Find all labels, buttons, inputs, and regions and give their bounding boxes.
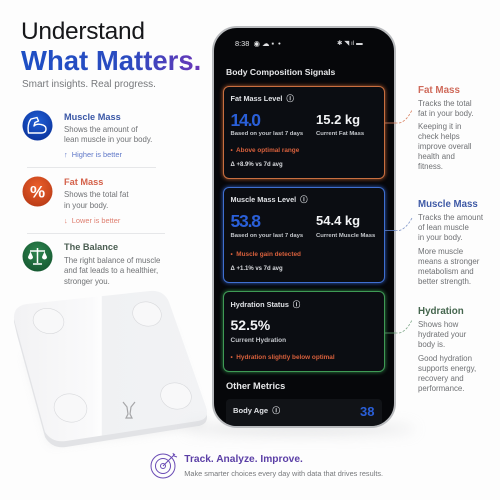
card: muscle mass level: Δ +1.1% vs 7d avg xyxy=(230,266,283,272)
description xyxy=(64,190,129,210)
card: muscle mass level: Muscle Mass Level ⓘ xyxy=(230,194,308,204)
right callout: muscle mass: Muscle Mass xyxy=(418,198,478,210)
right callout: muscle mass: Tracks the amount xyxy=(418,212,483,222)
card: hydration status: 52.5% xyxy=(230,317,270,333)
status bar: ✱ ◥ ıl ▬ xyxy=(337,40,363,46)
description: Shows the amount of xyxy=(64,125,138,134)
card: muscle mass level: 54.4 kg xyxy=(316,213,360,228)
note: ↓ Lower is better xyxy=(64,216,120,224)
right callout: hydration: Good hydration xyxy=(418,354,472,363)
description: lean muscle in your body. xyxy=(64,135,152,144)
status bar xyxy=(235,38,363,48)
title xyxy=(21,18,201,76)
footer heading: Track. Analyze. Improve. xyxy=(184,454,303,465)
connector lines xyxy=(385,110,412,334)
heading: The Balance xyxy=(64,242,118,252)
description: The right balance of muscle xyxy=(64,256,160,264)
row: body age xyxy=(226,399,382,429)
heading: body composition signals: Body Composition Signals xyxy=(226,66,335,76)
heading: Fat Mass xyxy=(64,177,103,187)
card: fat mass level: Based on your last 7 days xyxy=(230,131,303,137)
right callout: fat mass: health and xyxy=(418,152,455,161)
right callout: fat mass: check helps xyxy=(418,132,460,141)
card: muscle mass level: Current Muscle Mass xyxy=(316,233,375,239)
card: fat mass level: Fat Mass Level ⓘ xyxy=(230,94,294,102)
card: fat mass level: Δ +8.9% vs 7d avg xyxy=(230,162,283,168)
right callout: fat mass: fitness. xyxy=(418,162,443,171)
right callout: hydration: hydrated your xyxy=(418,330,466,339)
card: muscle mass level: Based on your last 7 days xyxy=(230,233,303,239)
icon: target xyxy=(150,452,178,478)
card: hydration status: Current Hydration xyxy=(230,337,286,344)
description: and fat leads to a healthier, xyxy=(64,266,158,275)
title: Understand xyxy=(21,18,145,45)
footer text: Make smarter choices every day with data that drives results. xyxy=(184,468,383,478)
right callout: hydration: performance. xyxy=(418,384,464,393)
description xyxy=(64,125,152,144)
card: fat mass level: 14.0 xyxy=(230,110,260,130)
icon: percent xyxy=(22,176,52,206)
right callout: muscle mass: in your body. xyxy=(418,232,463,242)
heading: other metrics: Other Metrics xyxy=(226,380,285,390)
left item: the balance xyxy=(22,242,160,286)
icon: percent: % xyxy=(30,182,45,202)
right callout: fat mass: improve overall xyxy=(418,142,472,151)
card: hydration status xyxy=(223,291,385,372)
description: Shows the total fat xyxy=(64,190,129,199)
shadow under phone xyxy=(185,424,415,434)
right callout: muscle mass: More muscle xyxy=(418,246,463,256)
right callout: fat mass xyxy=(418,85,474,171)
note: ↑ Higher is better xyxy=(64,150,122,159)
right callout: hydration xyxy=(418,306,476,393)
footer banner xyxy=(150,452,383,478)
description xyxy=(64,256,160,286)
icon: flexed arm xyxy=(22,110,52,140)
icon: scales xyxy=(22,242,52,272)
right callout: muscle mass: means a stronger xyxy=(418,256,479,266)
row: body age: Body Age ⓘ xyxy=(233,406,280,415)
card: hydration status: • Hydration slightly below optimal xyxy=(230,354,335,361)
left item: fat mass xyxy=(22,176,129,224)
right callout: hydration: Hydration xyxy=(418,306,464,317)
right callout: fat mass: Keeping it in xyxy=(418,122,461,131)
card: muscle mass level: • Muscle gain detected xyxy=(230,251,301,258)
title: What Matters. xyxy=(21,45,201,76)
right callout: muscle mass xyxy=(418,198,483,286)
phone xyxy=(212,26,396,428)
right callout: fat mass: Fat Mass xyxy=(418,85,460,96)
right callout: hydration: recovery and xyxy=(418,374,464,383)
right callout: muscle mass: metabolism and xyxy=(418,266,474,276)
card: muscle mass level xyxy=(223,187,385,283)
card: fat mass level xyxy=(223,86,385,179)
description: in your body. xyxy=(64,201,108,210)
card: fat mass level: 15.2 kg xyxy=(316,112,360,127)
card: muscle mass level: 53.8 xyxy=(230,210,260,230)
right callout: hydration: body is. xyxy=(418,340,445,349)
left item: muscle mass xyxy=(22,110,152,159)
right callout: fat mass: fat in your body. xyxy=(418,109,474,118)
right callout: muscle mass: better strength. xyxy=(418,276,471,286)
right callout: hydration: supports energy, xyxy=(418,364,476,373)
heading: Muscle Mass xyxy=(64,112,121,122)
status bar: 8:38 ◉ ☁ ▪ • xyxy=(235,38,281,48)
right callout: fat mass: Tracks the total xyxy=(418,99,472,108)
product: smart scale xyxy=(14,291,207,448)
right callout: hydration: Shows how xyxy=(418,320,458,329)
card: hydration status: Hydration Status ⓘ xyxy=(230,300,300,308)
description: stronger you. xyxy=(64,277,110,286)
right callout: muscle mass: of lean muscle xyxy=(418,222,469,232)
card: fat mass level: • Above optimal range xyxy=(230,147,299,154)
row: body age: 38 xyxy=(360,404,374,418)
card: fat mass level: Current Fat Mass xyxy=(316,131,364,137)
subtitle: Smart insights. Real progress. xyxy=(22,79,156,90)
